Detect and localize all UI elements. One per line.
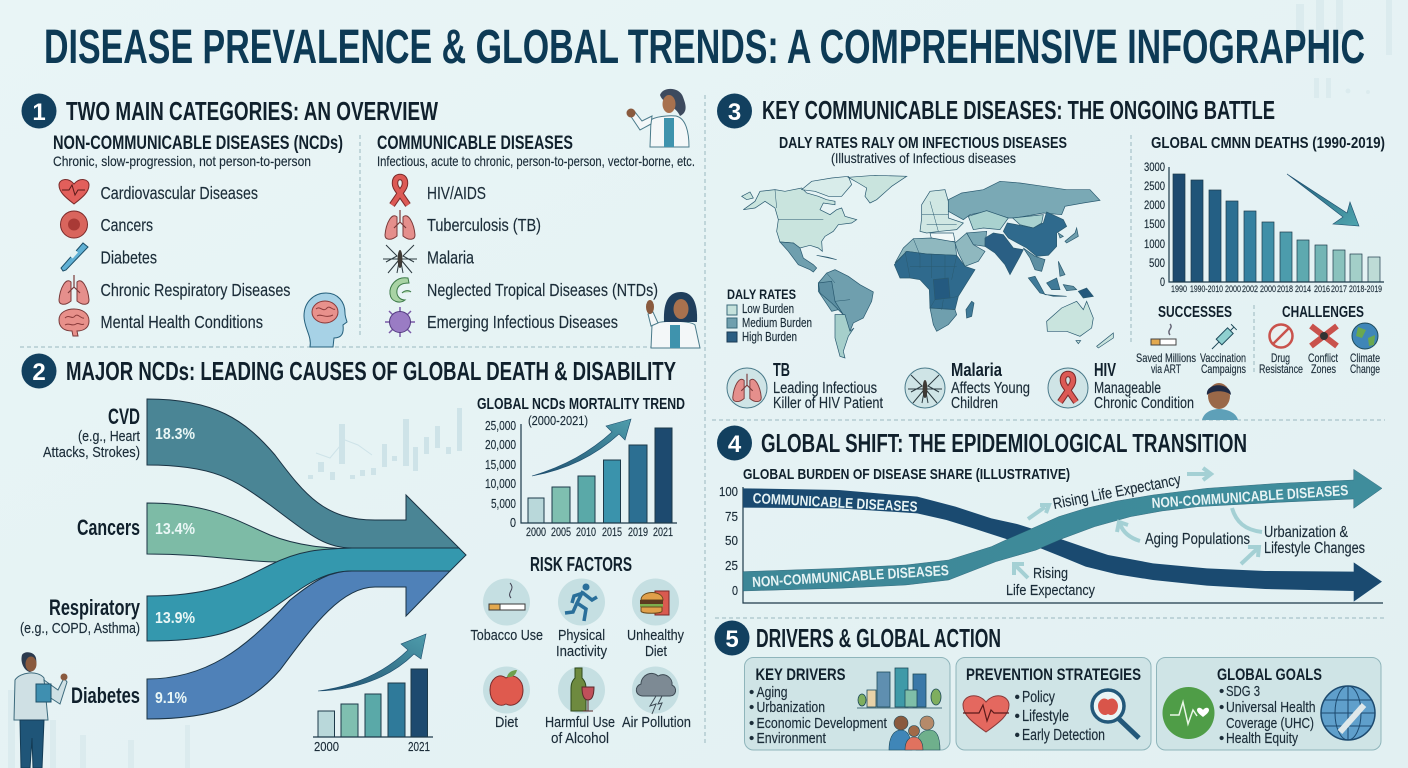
section 3 badge (717, 94, 752, 128)
y axis labels: 0 (1160, 275, 1165, 289)
label: via ART: via ART (1151, 362, 1181, 376)
prevention list: • (1014, 727, 1020, 744)
label: vaccination: Vaccination (1200, 351, 1246, 365)
chart title: GLOBAL NCDs MORTALITY TREND (477, 396, 685, 413)
bars (1173, 174, 1380, 282)
x axis labels: 2010 (576, 525, 596, 539)
sankey flow diagram (147, 399, 466, 719)
icon: storm cloud (632, 666, 679, 714)
band label: communicable: COMMUNICABLE DISEASES (752, 491, 918, 516)
prevention list: Early Detection (1022, 727, 1105, 744)
communicable description: Infectious, acute to chronic, person-to-person, vector-borne, etc. (377, 153, 695, 169)
section 3 badge: 3 (728, 99, 741, 126)
list item: emerging: Emerging Infectious Diseases (427, 312, 618, 332)
annotation: rising life expectancy upper: Rising Life Expectancy (1052, 471, 1183, 513)
x axis labels: 2000 (1260, 284, 1276, 295)
driver list: Economic Development (756, 715, 888, 732)
icon: virus (385, 307, 415, 337)
flow: respiratory (147, 548, 466, 641)
icon: running figure (558, 578, 605, 626)
y axis labels: 2500 (1144, 179, 1165, 193)
x axis labels: 1990 (1171, 284, 1187, 295)
list item: malaria: Malaria (427, 248, 474, 268)
x axis labels: 1990-2010 (1190, 284, 1223, 295)
goals list: SDG 3 (1226, 683, 1260, 700)
band label: non-communicable upper: NON-COMMUNICABLE DISEASES (1151, 483, 1349, 512)
y axis labels: 50 (725, 534, 738, 548)
card: global goals (1156, 658, 1381, 750)
y axis labels: 20,000 (485, 437, 516, 452)
annotation: lifestyle changes: Lifestyle Changes (1264, 540, 1365, 557)
section 4 badge: 4 (728, 431, 742, 458)
bars (318, 669, 428, 737)
legend label high: High Burden (742, 329, 797, 344)
icon: parasite worm (390, 278, 411, 302)
panel: section 3 communicable diseases (717, 94, 1385, 420)
goals list: • (1219, 699, 1224, 716)
y axis labels: 1500 (1144, 217, 1165, 231)
prevention list: • (1014, 689, 1020, 706)
driver list: Aging (756, 684, 788, 701)
y axis labels: 15,000 (485, 457, 516, 472)
panel: section 5 drivers and action (714, 620, 1381, 750)
legend swatch high (727, 332, 737, 342)
goals list: Health Equity (1226, 730, 1298, 747)
list item: diabetes: Diabetes (100, 248, 157, 268)
driver list: • (749, 715, 754, 732)
legend label medium: Medium Burden (742, 315, 812, 330)
section 2 badge (22, 354, 56, 388)
label: harmful use: Harmful Use (545, 714, 615, 731)
x axis labels: 2016 (1314, 284, 1330, 295)
world map (742, 175, 1113, 358)
driver list: • (749, 684, 754, 701)
communicable column heading: COMMUNICABLE DISEASES (377, 133, 573, 154)
y axis labels: 3000 (1144, 160, 1165, 174)
icon: lungs (385, 210, 415, 239)
y axis labels: 10,000 (485, 476, 516, 491)
icon: tobacco (483, 578, 530, 626)
malaria text line 2: Children (951, 395, 998, 412)
label: inactivity: Inactivity (556, 643, 607, 660)
malaria text line 1: Affects Young (951, 380, 1030, 397)
prevention list: Lifestyle (1022, 708, 1069, 725)
label: of alcohol: of Alcohol (551, 730, 609, 747)
risk factors heading: RISK FACTORS (530, 554, 632, 576)
label: respiratory: Respiratory (49, 595, 141, 620)
x axis labels: 2000 (526, 525, 546, 539)
figure: doctor gesturing top (626, 89, 689, 147)
annotation: rising: Rising (1033, 565, 1068, 582)
y axis labels: 25,000 (485, 418, 516, 433)
icon: globe with chain (1321, 686, 1375, 740)
driver list: Urbanization (756, 699, 825, 716)
icon: cigarette (1151, 324, 1176, 345)
downward arrow (1287, 174, 1359, 226)
figure: doctor with clipboard (14, 652, 68, 768)
list item: chronic respiratory: Chronic Respiratory Diseases (100, 280, 291, 300)
label: diabetes: Diabetes (71, 683, 140, 708)
icon: heart (59, 180, 89, 204)
risk factors panel (470, 554, 691, 747)
x axis labels: 2018-2019 (1349, 284, 1382, 295)
icon: TB lungs badge (727, 368, 767, 408)
panel: section 4 epidemiological transition (717, 426, 1383, 603)
flow: diabetes (147, 571, 450, 719)
band label: non-communicable lower: NON-COMMUNICABLE DISEASES (752, 563, 950, 591)
x axis labels: 2014 (1295, 284, 1311, 295)
trend arrow (318, 634, 426, 691)
annotation arrows (1014, 468, 1262, 578)
prevention list: • (1014, 708, 1020, 725)
icon: heart with pulse (963, 696, 1009, 732)
legend swatch low (727, 305, 737, 315)
diabetes percentage: 9.1% (155, 690, 187, 707)
icon: drug resistance (1270, 324, 1292, 348)
annotation: aging populations: Aging Populations (1145, 531, 1250, 548)
icon: magnifying glass with apple (1092, 690, 1139, 738)
respiratory percentage: 13.9% (155, 610, 195, 627)
icon: lungs (59, 275, 89, 304)
bars (528, 428, 672, 523)
annotation: urbanization: Urbanization & (1264, 524, 1349, 541)
chart axes (743, 487, 1383, 603)
map title: DALY RATES RALY OM INFECTIOUS DISEASES (779, 135, 1067, 152)
y axis labels: 75 (725, 510, 738, 524)
TB text line 2: Killer of HIV Patient (773, 395, 884, 412)
small trend chart (313, 634, 433, 754)
map legend (727, 286, 812, 344)
section 2 heading: MAJOR NCDs: LEADING CAUSES OF GLOBAL DEATH & DISABILITY (66, 356, 676, 386)
HIV text line 1: Manageable (1094, 380, 1161, 397)
driver list: Environment (756, 730, 827, 747)
y axis labels: 5,000 (491, 496, 516, 511)
label: climate: Climate (1350, 351, 1380, 365)
communicable diseases arrow (743, 488, 1382, 602)
figure: child (1202, 383, 1238, 420)
label: zones: Zones (1311, 362, 1336, 376)
x axis labels (526, 525, 673, 539)
x axis labels: 2015 (602, 525, 622, 539)
NCD column heading: NON-COMMUNICABLE DISEASES (NCDs) (53, 133, 343, 154)
x axis labels: 2000 (1225, 284, 1241, 295)
NCD description: Chronic, slow-progression, not person-to-person (53, 153, 311, 169)
icon: conflict zones (1311, 326, 1337, 346)
driver list: • (749, 730, 754, 747)
list item: cancers: Cancers (100, 215, 153, 235)
driver list: • (749, 699, 754, 716)
label: CVD example: (e.g., Heart (78, 428, 141, 445)
CMNN deaths chart (1144, 135, 1385, 295)
label: saved millions: Saved Millions (1136, 351, 1196, 365)
label: unhealthy: Unhealthy (627, 627, 684, 644)
icon: health badge (1162, 687, 1214, 739)
icon: cancer cell (60, 211, 88, 238)
icon: ribbon (392, 177, 408, 205)
card: prevention strategies (956, 658, 1151, 750)
icon: syringe (1209, 324, 1237, 352)
faint background chart (308, 408, 462, 480)
legend label low: Low Burden (742, 301, 794, 316)
y axis labels: 500 (1149, 256, 1165, 270)
icon: family (889, 716, 940, 750)
label: drug: Drug (1271, 351, 1290, 365)
y axis labels: 25 (725, 559, 738, 573)
list item: mental health: Mental Health Conditions (100, 312, 263, 332)
list item: NTDs: Neglected Tropical Diseases (NTDs) (427, 280, 658, 300)
y axis labels: 100 (719, 485, 738, 499)
icon: climate globe (1352, 323, 1378, 349)
y axis labels: 0 (510, 515, 516, 530)
y axis labels (485, 418, 516, 530)
non-communicable diseases arrow (743, 469, 1382, 591)
section 5 badge (714, 620, 750, 656)
section 5 heading: DRIVERS & GLOBAL ACTION (756, 623, 1001, 653)
label: air pollution: Air Pollution (622, 714, 691, 731)
icon: head with brain (304, 293, 347, 347)
y axis labels: 0 (732, 584, 738, 598)
y axis labels (1144, 160, 1165, 289)
TB heading: TB (773, 360, 790, 380)
x axis labels (1171, 284, 1382, 295)
label: change: Change (1350, 362, 1380, 376)
section 1 badge (22, 94, 56, 128)
trend arrow (532, 419, 631, 476)
section 1 badge: 1 (32, 99, 46, 126)
x axis labels: 2019 (628, 525, 648, 539)
panel: section 1 overview (22, 89, 700, 348)
label: resistance: Resistance (1259, 362, 1303, 376)
x axis labels: 2005 (551, 525, 571, 539)
label: diet: Diet (495, 714, 519, 731)
panel: section 2 major NCDs (14, 354, 691, 768)
section 4 badge (717, 426, 752, 460)
year label 2000: 2000 (314, 739, 339, 754)
HIV heading: HIV (1094, 360, 1116, 380)
annotation: life expectancy: Life Expectancy (1006, 582, 1095, 599)
y axis labels (719, 485, 738, 598)
legend swatch medium (727, 318, 737, 328)
label: CVD: CVD (108, 404, 140, 429)
map: Eurasia Africa Oceania (894, 181, 1113, 348)
list item: TB: Tuberculosis (TB) (427, 215, 541, 235)
legend title: DALY RATES (727, 286, 796, 302)
list item: cardiovascular: Cardiovascular Diseases (100, 183, 258, 203)
HIV text line 2: Chronic Condition (1094, 395, 1194, 412)
label: physical: Physical (558, 627, 605, 644)
flow: cancers (147, 503, 352, 562)
prevention list: Policy (1022, 689, 1055, 706)
goals list (1219, 683, 1316, 747)
figure: doctor pointing (646, 292, 700, 348)
section 1 heading: TWO MAIN CATEGORIES: AN OVERVIEW (66, 96, 438, 126)
label: diet: Diet (645, 643, 668, 660)
successes heading: SUCCESSES (1158, 304, 1232, 321)
map: Americas (742, 175, 907, 358)
CVD percentage: 18.3% (155, 426, 195, 443)
cancers percentage: 13.4% (155, 521, 195, 538)
label: CVD example line 2: Attacks, Strokes) (43, 444, 140, 461)
goals list: Universal Health (1226, 699, 1316, 716)
goals list: Coverage (UHC) (1226, 715, 1314, 732)
card heading: GLOBAL GOALS (1217, 665, 1322, 684)
chart subtitle: (2000-2021) (528, 413, 588, 428)
card heading: KEY DRIVERS (756, 665, 846, 684)
x axis labels: 2018 (1277, 284, 1293, 295)
section 2 badge: 2 (32, 359, 46, 386)
x axis labels: 2002 (1242, 284, 1258, 295)
prevention list (1014, 689, 1105, 744)
label: campaigns: Campaigns (1201, 362, 1246, 376)
icon: mosquito (383, 245, 417, 273)
mortality trend chart (477, 396, 685, 539)
year label 2021: 2021 (408, 739, 430, 754)
driver list (749, 684, 888, 747)
transition flow arrows (743, 469, 1382, 602)
map subtitle: (Illustratives of Infectious diseases (831, 151, 1016, 166)
challenges heading: CHALLENGES (1282, 304, 1364, 321)
icon: burger and soda (632, 578, 679, 626)
icon: brain (59, 309, 89, 336)
list item: HIV: HIV/AIDS (427, 183, 486, 203)
transition chart title: GLOBAL BURDEN OF DISEASE SHARE (ILLUSTRATIVE) (743, 466, 1070, 483)
label: cancers: Cancers (77, 515, 140, 540)
malaria heading: Malaria (951, 360, 1003, 380)
label: conflict: Conflict (1308, 351, 1338, 365)
y axis labels: 1000 (1144, 237, 1165, 251)
flow: CVD (147, 399, 459, 548)
label: respiratory example: (e.g., COPD, Asthma) (20, 620, 140, 637)
icon: HIV ribbon badge (1048, 368, 1088, 408)
goals list: • (1219, 683, 1224, 700)
icon: insulin pen (61, 243, 88, 271)
label: tobacco use: Tobacco Use (470, 627, 543, 644)
card heading: PREVENTION STRATEGIES (966, 665, 1141, 684)
section 5 badge: 5 (725, 626, 739, 653)
card: key drivers (744, 658, 950, 750)
goals list: • (1219, 730, 1224, 747)
icon: wine (558, 666, 605, 714)
icon: malaria mosquito badge (905, 368, 945, 408)
y axis labels: 2000 (1144, 198, 1165, 212)
icon: city skyline (857, 668, 942, 708)
x axis labels: 2017 (1331, 284, 1347, 295)
x axis labels: 2021 (653, 525, 673, 539)
icon: apple (483, 666, 530, 714)
TB text line 1: Leading Infectious (773, 380, 877, 397)
